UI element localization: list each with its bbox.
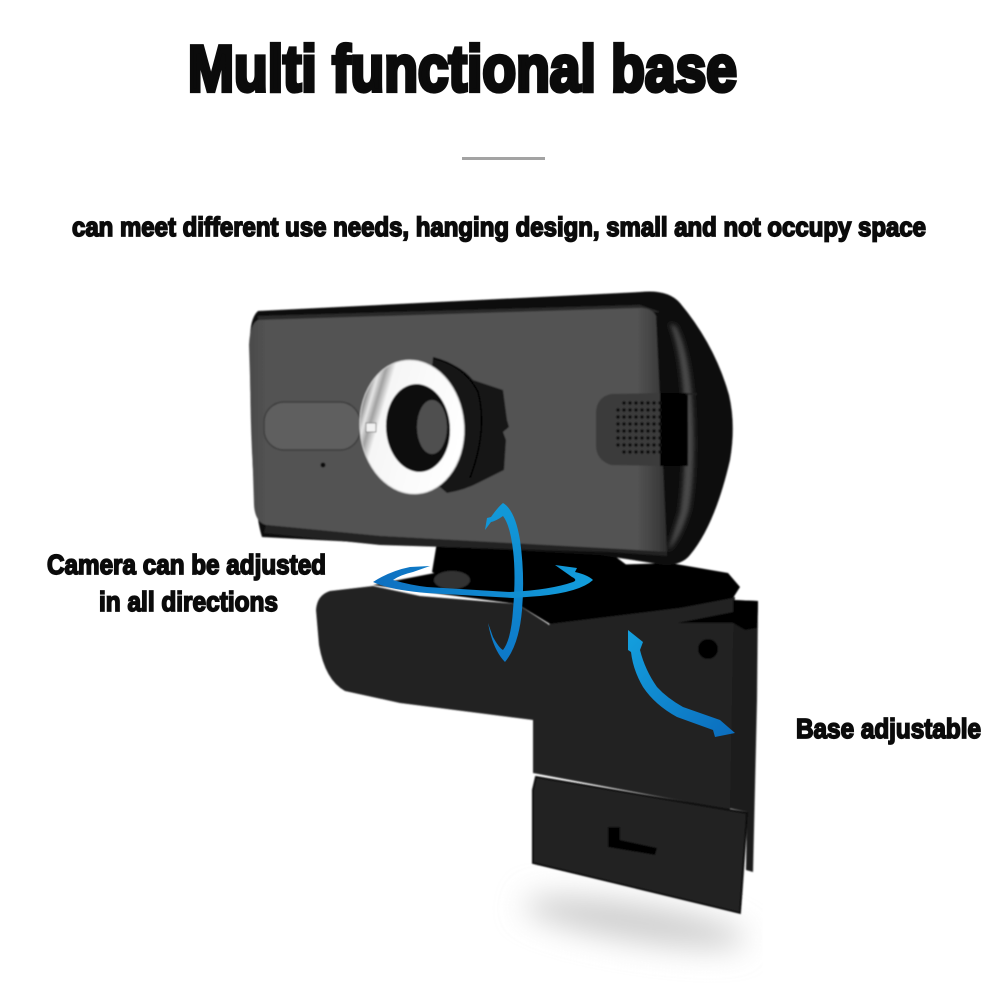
camera back shell (250, 291, 733, 565)
ring tabs (366, 423, 376, 432)
indicator dot (320, 462, 326, 468)
camera bottom trim (264, 525, 667, 556)
camera top trim (258, 305, 660, 322)
swivel knob (434, 571, 470, 589)
arrow: horizontal rotation (373, 565, 593, 598)
divider (462, 157, 545, 160)
clip upper plate (533, 597, 735, 810)
clip lower plate (533, 777, 747, 913)
lens glass (417, 400, 447, 454)
lens silver ring (354, 356, 470, 498)
ground shadow (522, 887, 748, 957)
camera front face (249, 308, 667, 552)
label: camera adjustment (47, 549, 326, 617)
camera side band (668, 324, 694, 550)
base front arm (316, 586, 560, 720)
clip top shadow (677, 600, 758, 630)
lens barrel (420, 358, 509, 493)
swivel neck (432, 530, 640, 596)
title: Multi functional base (188, 32, 737, 105)
lens opening (383, 382, 453, 474)
display pill (264, 402, 360, 450)
speaker grille (596, 393, 697, 466)
arrow: base tilt (628, 630, 735, 737)
arrow: vertical rotation (485, 503, 523, 662)
clip notch (608, 827, 657, 855)
base top plane (373, 563, 740, 624)
webcam illustration (249, 291, 758, 957)
label: camera adjustment: in all directions (99, 586, 278, 617)
label: camera adjustment: Camera can be adjusted (47, 549, 326, 580)
hinge hole (698, 639, 718, 659)
clip rear strip (728, 600, 758, 872)
